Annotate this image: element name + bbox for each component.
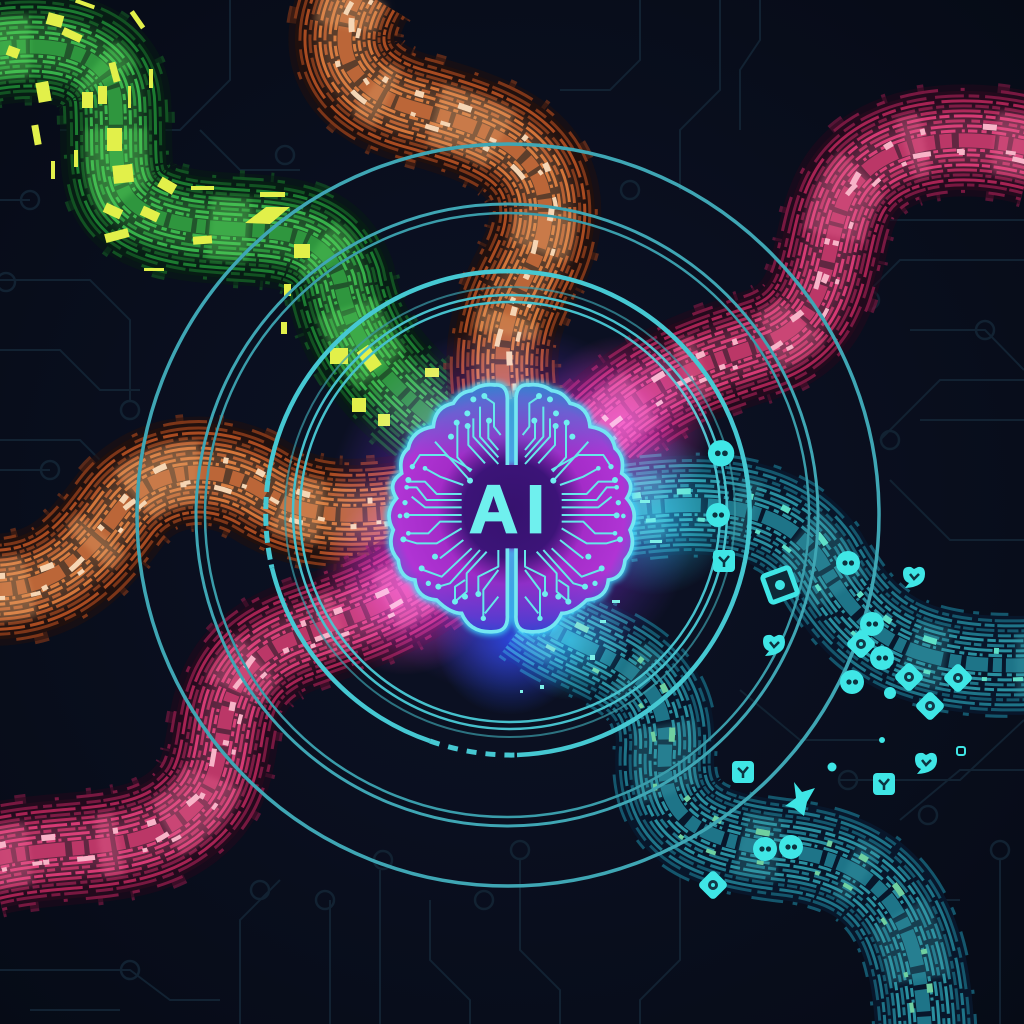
left hemisphere — [389, 385, 512, 632]
brain outer glow — [389, 385, 634, 632]
yellow data blocks on green stream — [6, 0, 439, 426]
data stream: orange left — [0, 459, 420, 602]
AI brain — [389, 385, 634, 632]
data stream: orange top — [336, 0, 557, 412]
AI label: AI — [469, 472, 553, 548]
data stream: teal bottom — [520, 601, 932, 1024]
concentric rings — [137, 144, 879, 886]
cyan sparks near brain — [520, 500, 662, 693]
central glow — [315, 325, 735, 715]
data stream: crimson lower left — [0, 546, 462, 872]
data stream: green — [0, 47, 440, 425]
data stream: teal right — [615, 491, 1024, 679]
data stream: crimson right — [582, 126, 1024, 452]
social and media icons — [697, 440, 974, 901]
right hemisphere — [511, 385, 634, 632]
